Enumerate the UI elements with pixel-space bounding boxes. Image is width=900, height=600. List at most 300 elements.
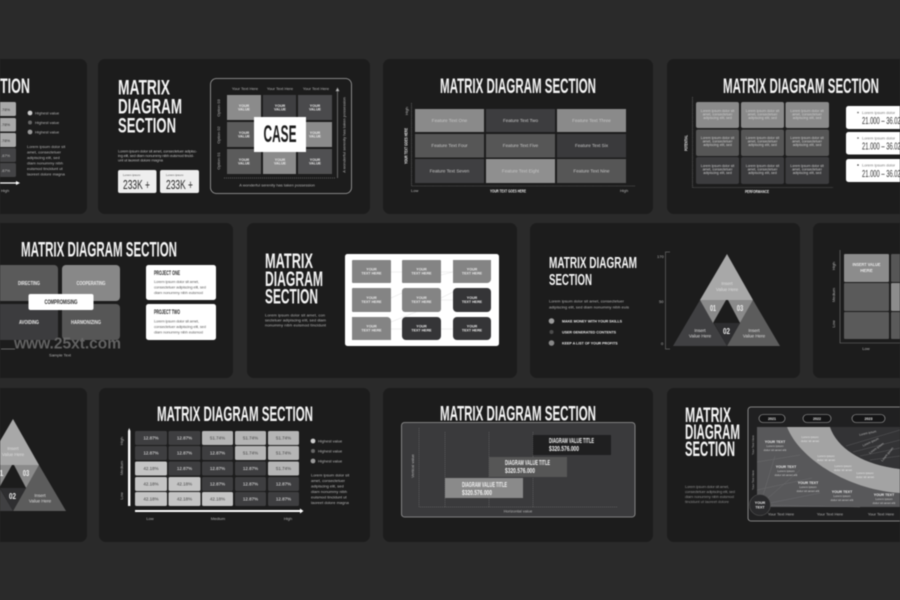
heat map cells: 12.87% xyxy=(210,466,225,471)
matrix quadrants: AVOIDING xyxy=(19,320,39,326)
arc labels: Lorem ipsum xyxy=(801,435,819,439)
axis text: Option 01 xyxy=(216,152,221,170)
matrix cells: YOUR xyxy=(239,104,250,108)
side labels: Your Text Here xyxy=(751,435,755,455)
text block: unt ut laoreet dolore magna xyxy=(118,158,164,162)
title: SECTION xyxy=(265,286,318,308)
stacked value bars: .87% xyxy=(1,168,11,173)
axis labels: High xyxy=(831,262,836,270)
panel: stepped value matrix xyxy=(383,388,653,542)
matrix cells: adipiscing elit, sed xyxy=(793,116,821,120)
axis labels: Medium xyxy=(831,287,836,302)
project card: Lorem ipsum dolor sit amet, xyxy=(154,279,199,284)
matrix cells: Lorem ipsum dolor sit xyxy=(790,109,824,113)
triangle: top xyxy=(700,254,753,300)
heat map cells: 51.74% xyxy=(276,450,291,456)
text block: tincidunt ut laoreet dolore xyxy=(685,499,730,504)
text block: Lorem ipsum dolor sit amet, xyxy=(685,484,729,489)
title xyxy=(685,404,740,461)
text block: Lorem ipsum dolor sit amet, consectetuer adipisc- xyxy=(118,148,198,154)
title xyxy=(549,255,637,289)
diagram frame xyxy=(748,407,900,521)
panel: row 3 cropped triangle xyxy=(0,388,87,542)
heat map cells: 51.74% xyxy=(276,436,291,440)
axis labels: Low xyxy=(411,188,418,193)
triangle: 03 xyxy=(728,300,753,323)
title: MATRIX xyxy=(685,404,731,427)
matrix quadrants: HARMONIZING xyxy=(71,320,101,326)
matrix quadrants: COOPERATING xyxy=(76,281,106,287)
matrix cells: adipiscing elit, sed xyxy=(793,143,821,147)
triangle labels: Insert xyxy=(748,328,760,333)
matrix cells: Lorem ipsum dolor sit xyxy=(746,136,779,140)
axis labels: PERFORMANCE xyxy=(745,189,769,194)
matrix cells: YOUR xyxy=(416,296,427,300)
title fragment: TION xyxy=(0,75,30,98)
matrix quadrants xyxy=(0,265,120,340)
center label xyxy=(28,294,94,310)
axis text: Option 03 xyxy=(216,99,221,117)
year pills: 2021 xyxy=(768,417,776,421)
value card: Lorem ipsum dolor xyxy=(862,136,896,140)
axis label: High xyxy=(1,188,9,193)
axis labels: High xyxy=(620,188,628,193)
heat map cells: 51.74% xyxy=(243,450,258,456)
matrix cells: HERE xyxy=(860,268,873,273)
axis text: A wonderful serenity has taken possession xyxy=(239,182,315,188)
arc labels: YOUR TEXT xyxy=(765,440,786,444)
panel: arc matrix xyxy=(667,388,900,542)
title: MATRIX DIAGRAM SECTION xyxy=(157,403,313,426)
text block: diam nonummy nibh xyxy=(27,160,63,166)
panel: case matrix xyxy=(98,59,370,214)
side labels xyxy=(751,435,755,490)
bullet list xyxy=(549,318,623,346)
triangle diagram: Value Here xyxy=(29,498,52,504)
arc labels: dolor sit amet xyxy=(834,468,852,472)
panel: heat matrix xyxy=(99,388,370,542)
matrix cells xyxy=(844,254,900,339)
matrix cells: Feature Text Seven xyxy=(430,168,470,174)
triangle diagram: 03 xyxy=(23,469,30,478)
case label xyxy=(254,117,306,152)
axis labels xyxy=(684,135,769,194)
value bar: medium: DIAGRAM VALUE TITLE xyxy=(505,460,550,467)
matrix cells xyxy=(696,102,829,184)
project card: consectetuer adipiscing elit, sed xyxy=(154,284,206,290)
arc labels xyxy=(764,429,895,505)
title: DIAGRAM xyxy=(265,268,323,291)
title: MATRIX DIAGRAM SECTION xyxy=(440,75,596,98)
stacked value bars: .78% xyxy=(1,107,11,112)
triangle labels: Value Here xyxy=(716,287,739,292)
year pills xyxy=(759,414,885,422)
axis text: A wonderful serenity has taken possession xyxy=(342,97,346,173)
legend: Highest value xyxy=(318,438,343,444)
matrix cells xyxy=(415,109,626,183)
matrix cells: amet, consectetuer xyxy=(748,140,778,144)
axis labels: Low xyxy=(119,492,124,500)
axis labels: YOUR TEXT GOES HERE xyxy=(490,188,526,194)
matrix cells: YOUR xyxy=(366,268,377,272)
triangle: lower right xyxy=(727,300,780,346)
heat map cells: 12.87% xyxy=(143,450,159,456)
triangle: center xyxy=(714,300,740,323)
heat map cells: 51.74% xyxy=(210,436,225,440)
matrix cells: Feature Text One xyxy=(432,118,468,123)
column headers: Your Text Here xyxy=(303,86,330,91)
arc labels: YOUR TEXT xyxy=(832,490,853,494)
triangle labels: Insert xyxy=(721,281,733,286)
matrix cells: amet, consectetuer xyxy=(748,168,778,172)
center label: COMPROMISING xyxy=(44,300,78,306)
arrow: horizontal axis xyxy=(0,181,20,185)
arc labels: Lorem ipsum xyxy=(833,494,851,498)
axis labels: Horizontal value xyxy=(504,508,533,514)
value card xyxy=(846,159,900,182)
chart frame xyxy=(402,422,635,517)
matrix cells: YOUR xyxy=(366,296,377,300)
panel: flow matrix xyxy=(247,223,517,378)
matrix cells: YOUR xyxy=(310,158,321,162)
value bar: high xyxy=(533,435,611,455)
value bar: medium: $320.576.000 xyxy=(505,468,535,475)
text block: adipiscing elit, sed diam nonummy nibh euis xyxy=(549,304,629,310)
triangle labels: Insert xyxy=(694,328,706,333)
matrix cells: Feature Text Nine xyxy=(573,168,610,174)
matrix cells: TEXT HERE xyxy=(462,272,483,276)
matrix cells: amet, consectetuer xyxy=(792,168,823,172)
matrix cells xyxy=(352,260,491,340)
text block: sectetuer adipiscing elit, sed diam xyxy=(265,318,327,322)
value card xyxy=(846,132,900,154)
text block: adipiscing elit, sed xyxy=(311,484,344,488)
title: SECTION xyxy=(549,272,592,289)
scale axis: 0 xyxy=(661,341,664,346)
case label: CASE xyxy=(264,121,296,148)
heat map cells: 42.18% xyxy=(143,482,159,486)
center badge xyxy=(750,494,770,516)
arc labels: YOUR TEXT xyxy=(874,493,895,497)
arc band xyxy=(787,427,900,493)
value bar: high: $320.576.000 xyxy=(549,446,579,453)
arrow: horizontal axis xyxy=(135,508,304,514)
text block: ing elit, sed diam nonummy nibh euismod tincid- xyxy=(118,153,195,158)
text block xyxy=(265,312,327,328)
bottom labels: Your Text Here xyxy=(817,512,844,516)
connector lines xyxy=(391,272,453,329)
arc inner xyxy=(830,427,900,469)
value bar: medium xyxy=(489,457,567,477)
panel: performance matrix xyxy=(667,59,900,214)
center badge: TEXT xyxy=(755,506,765,510)
stacked value bars: .87% xyxy=(1,153,11,158)
value card: Lorem ipsum dolor xyxy=(862,110,896,115)
axes xyxy=(840,250,900,343)
matrix cells: YOUR xyxy=(275,158,286,162)
project card: diam nonummy nibh euismod xyxy=(154,330,203,334)
title: DIAGRAM xyxy=(118,96,182,118)
matrix cells: Feature Text Three xyxy=(572,118,611,123)
heat map cells: 51.74% xyxy=(276,466,291,471)
bottom labels: Your Text Here xyxy=(768,512,795,516)
triangle labels: Value Here xyxy=(689,334,712,338)
arc labels: dolor sit amet elit xyxy=(873,501,895,505)
matrix cells: amet, consectetuer xyxy=(792,112,823,116)
axis labels xyxy=(119,437,292,521)
arc labels: dolor sit amet xyxy=(801,439,819,443)
text block xyxy=(685,484,735,504)
triangle: lower left xyxy=(673,300,727,346)
heat map cells: 42.18% xyxy=(177,496,192,502)
heat map cells: 12.87% xyxy=(210,450,225,456)
panel: triangle matrix xyxy=(530,223,800,378)
matrix cells: Lorem ipsum dolor sit xyxy=(701,164,734,168)
triangle diagram: Insert xyxy=(34,493,46,498)
axis labels: Low xyxy=(862,346,870,351)
matrix cells: YOUR xyxy=(310,104,321,108)
title: MATRIX DIAGRAM SECTION xyxy=(21,238,177,262)
project card: PROJECT ONE xyxy=(154,271,180,277)
value bar: low xyxy=(445,478,523,498)
heat map cells: 42.18% xyxy=(210,496,225,502)
matrix cells: YOUR xyxy=(416,268,427,272)
legend: Highest value xyxy=(35,110,60,116)
matrix cells: adipiscing elit, sed xyxy=(703,143,732,147)
axes xyxy=(419,428,618,507)
stacked value bars: .78% xyxy=(1,138,11,143)
matrix cells: Lorem ipsum dolor sit xyxy=(790,136,824,140)
triangle diagram: Value Here xyxy=(2,452,25,457)
year pills: 2022 xyxy=(813,417,821,421)
bullet list: KEEP A LIST OF YOUR PROFITS xyxy=(562,342,618,346)
title: MATRIX DIAGRAM xyxy=(549,255,637,272)
matrix cells: TEXT HERE xyxy=(462,300,483,304)
triangle labels: 01 xyxy=(710,304,716,313)
arc labels: YOUR TEXT xyxy=(776,465,797,469)
matrix cells: VALUE xyxy=(238,108,251,112)
matrix cells: amet, consectetuer xyxy=(792,140,823,144)
value card xyxy=(846,106,900,129)
axis labels: Low xyxy=(831,320,836,328)
legend: Highest value xyxy=(35,120,60,125)
matrix cells: VALUE xyxy=(309,134,322,138)
year pills: 2023 xyxy=(864,417,872,421)
heat map cells xyxy=(135,431,299,506)
axis labels: Medium xyxy=(119,460,124,475)
project card: PROJECT TWO xyxy=(154,310,180,316)
text block: euismod tincidunt ut xyxy=(27,166,63,171)
heat map cells: 12.87% xyxy=(177,436,192,440)
arc labels: dolor sit amet xyxy=(856,475,874,479)
matrix cells: Feature Text Four xyxy=(431,143,468,148)
matrix cells: Lorem ipsum dolor sit xyxy=(746,164,779,168)
white board xyxy=(345,254,499,346)
axes xyxy=(224,88,339,178)
matrix cells: adipiscing elit, sed xyxy=(748,143,777,147)
stat card: 233K + xyxy=(123,177,150,192)
arrow: vertical axis xyxy=(128,428,130,506)
axis labels: Medium xyxy=(211,516,226,521)
matrix cells: YOUR xyxy=(239,131,250,135)
heat map cells: 12.87% xyxy=(177,466,192,471)
matrix cells: TEXT HERE xyxy=(361,328,382,332)
matrix cells: YOUR xyxy=(310,131,321,135)
legend: Highest value xyxy=(318,458,343,464)
heat map cells: 51.74% xyxy=(243,436,258,440)
matrix cells: YOUR xyxy=(239,158,250,162)
title xyxy=(265,250,323,308)
matrix cells: adipiscing elit, sed xyxy=(793,171,821,175)
matrix cells: TEXT HERE xyxy=(411,272,432,276)
text block: euismod tincidunt ut xyxy=(311,494,347,500)
legend: Highest value xyxy=(318,448,343,454)
scale axis: 170 xyxy=(657,254,664,259)
legend: Highest value xyxy=(35,130,60,134)
scale axis xyxy=(657,252,670,349)
axis text: Option 02 xyxy=(216,126,221,144)
arc labels: YOUR TEXT xyxy=(798,481,819,485)
project card xyxy=(146,265,216,300)
text block xyxy=(311,472,350,505)
axis text xyxy=(216,97,346,188)
arc labels: dolor sit amet elit xyxy=(764,448,786,452)
project card: consectetuer adipiscing elit, sed xyxy=(154,324,206,329)
matrix quadrants: DIRECTING xyxy=(18,281,40,287)
arc labels: Lorem ipsum xyxy=(766,444,784,448)
axis labels: High xyxy=(119,437,124,445)
triangle: 01 xyxy=(700,300,726,323)
project card: Lorem ipsum dolor sit amet, xyxy=(154,318,199,324)
triangle diagram xyxy=(673,254,780,346)
axis labels: Vertical value xyxy=(410,453,415,478)
text block: laoreet dolore magna xyxy=(27,172,66,176)
matrix cells: TEXT HERE xyxy=(462,328,483,332)
text block xyxy=(549,298,629,310)
matrix cells xyxy=(227,95,332,174)
scale axis: 50 xyxy=(659,299,664,304)
text block xyxy=(27,144,66,176)
matrix cells: VALUE xyxy=(309,162,322,166)
matrix cells: VALUE xyxy=(274,162,287,166)
column headers: Your Text Here xyxy=(267,86,294,91)
heat map cells: 12.87% xyxy=(210,482,225,486)
arc labels: Lorem ipsum xyxy=(856,471,874,475)
arc labels: Lorem ipsum xyxy=(777,469,795,473)
triangle labels: 02 xyxy=(723,327,730,336)
value bar: high: DIAGRAM VALUE TITLE xyxy=(549,438,594,445)
triangle labels: Value Here xyxy=(743,334,766,338)
heat map cells: 42.18% xyxy=(143,466,159,471)
value bar: low: DIAGRAM VALUE TITLE xyxy=(462,482,507,489)
heat map cells: 12.87% xyxy=(243,466,258,471)
heat map cells: 12.87% xyxy=(177,450,192,456)
matrix cells: VALUE xyxy=(238,134,251,138)
matrix cells: TEXT HERE xyxy=(361,272,382,276)
triangle labels: 03 xyxy=(737,304,744,313)
matrix cells: adipiscing elit, sed xyxy=(748,171,777,175)
heat map cells: 12.87% xyxy=(243,482,258,486)
arc labels: Lorem ipsum xyxy=(859,429,877,437)
matrix cells: INSERT VALUE xyxy=(852,262,880,267)
arc labels: dolor sit amet elit xyxy=(831,498,853,502)
text block: amet, consectetuer xyxy=(311,478,346,483)
matrix cells: Feature Text Eight xyxy=(502,168,540,174)
panel: row 1 cropped matrix xyxy=(0,59,87,214)
legend xyxy=(311,438,343,464)
matrix cells: YOUR xyxy=(467,268,478,272)
matrix cells: adipiscing elit, sed xyxy=(703,116,732,120)
arc labels: Lorem ipsum xyxy=(875,497,893,501)
matrix cells: adipiscing elit, sed xyxy=(748,116,777,120)
matrix cells: Feature Text Two xyxy=(503,118,538,123)
arc labels: Lorem ipsum xyxy=(799,485,817,489)
arc labels: Lorem ipsum xyxy=(834,464,852,468)
matrix cells: YOUR xyxy=(275,104,286,108)
matrix cells: amet, consectetuer xyxy=(748,112,778,116)
text block: nonummy nibh euismod tincidunt xyxy=(265,322,327,328)
matrix cells: YOUR xyxy=(467,296,478,300)
axis labels xyxy=(410,453,533,514)
title: DIAGRAM xyxy=(685,421,740,444)
stat card xyxy=(160,170,199,193)
title: MATRIX xyxy=(118,76,170,100)
matrix cells: amet, consectetuer xyxy=(703,168,733,172)
bottom labels: Your Text Here xyxy=(868,512,895,516)
axis labels: POTENTIAL xyxy=(684,135,688,151)
stat card: Lorem ipsum xyxy=(123,173,141,177)
heat map cells: 42.18% xyxy=(177,482,192,486)
stacked value bars xyxy=(0,102,16,177)
stacked value bars: .78% xyxy=(1,122,11,127)
project card: diam nonummy nibh euismod xyxy=(154,290,203,295)
matrix cells: Lorem ipsum dolor sit xyxy=(701,136,734,140)
column headers: Your Text Here xyxy=(232,86,259,91)
axis labels: Low xyxy=(146,516,154,521)
heat map cells: 12.87% xyxy=(276,496,291,502)
side labels: Your Text Here xyxy=(751,470,755,490)
axis labels xyxy=(831,262,870,351)
heat map cells: 12.87% xyxy=(276,482,291,486)
text block: diam nonummy nibh euismod xyxy=(685,494,734,499)
stat card xyxy=(118,170,156,193)
matrix cells: amet, consectetuer xyxy=(703,140,733,144)
text block: Lorem ipsum dolor sit xyxy=(27,144,66,149)
project card xyxy=(146,304,216,340)
text block: laoreet dolore magna xyxy=(311,500,350,505)
matrix cells: Feature Text Six xyxy=(575,143,609,148)
axis labels: YOUR TEXT GOES HERE xyxy=(404,128,408,164)
title: SECTION xyxy=(118,114,176,138)
bullet list: MAKE MONEY WITH YOUR SKILLS xyxy=(562,320,623,324)
matrix cells: VALUE xyxy=(274,108,287,112)
panel: conflict modes matrix xyxy=(0,223,233,378)
triangle diagram: 02 xyxy=(9,492,16,501)
text block xyxy=(118,148,198,162)
matrix cells: Lorem ipsum dolor sit xyxy=(701,109,734,113)
matrix cells: TEXT HERE xyxy=(411,328,432,332)
bottom labels xyxy=(768,512,895,516)
arc regions xyxy=(757,427,900,507)
matrix cells: TEXT HERE xyxy=(411,300,432,304)
sample text caption: Sample Text xyxy=(49,352,72,358)
panel: feature matrix xyxy=(383,59,653,214)
matrix cells: YOUR xyxy=(366,324,377,328)
title: MATRIX xyxy=(265,250,313,273)
stat card: Lorem ipsum xyxy=(166,173,184,177)
matrix cells: Feature Text Five xyxy=(503,143,539,148)
matrix cells: TEXT HERE xyxy=(361,300,382,304)
